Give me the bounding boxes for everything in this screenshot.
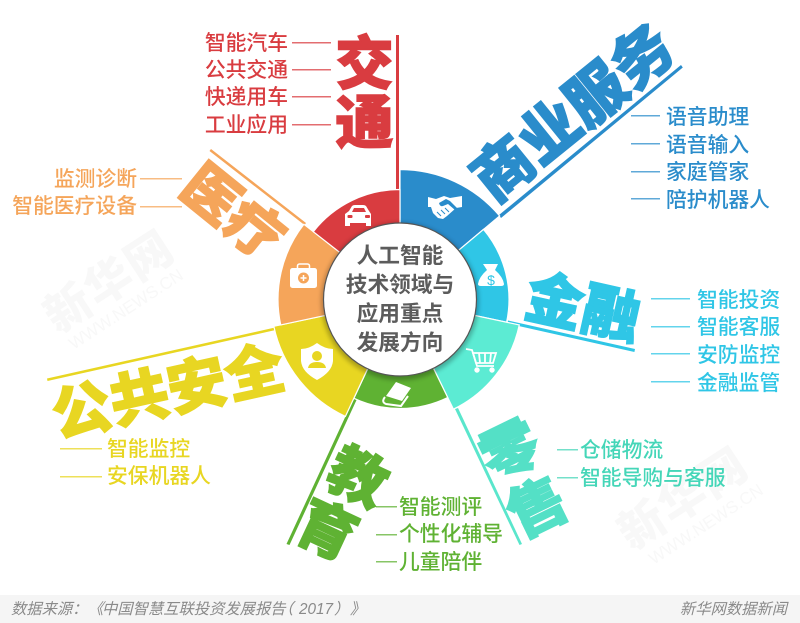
icon: medical kit xyxy=(290,264,317,288)
items: healthcare xyxy=(12,168,182,218)
title: public safety: 公共安全 xyxy=(46,335,291,450)
items: finance: 金融监管 xyxy=(697,372,780,395)
items: transport: 工业应用 xyxy=(205,114,288,137)
divider line: public safety xyxy=(47,328,276,381)
title: transport: 通 xyxy=(335,91,394,156)
icon: shopping cart xyxy=(466,349,496,372)
title: healthcare: 医疗 xyxy=(169,153,296,272)
source note: （ xyxy=(278,600,296,618)
items: public safety: 安保机器人 xyxy=(107,465,211,488)
items: education: 个性化辅导 xyxy=(399,523,503,546)
sector: business xyxy=(400,170,500,300)
title: finance: 金融 xyxy=(519,264,646,353)
items: business: 陪护机器人 xyxy=(666,189,770,212)
items: retail: 智能导购与客服 xyxy=(580,467,726,490)
center title: 发展方向 xyxy=(357,330,443,355)
items: finance: 智能投资 xyxy=(697,289,780,312)
divider line: business xyxy=(499,65,683,218)
sector: healthcare xyxy=(278,224,400,325)
items: education: 智能测评 xyxy=(399,496,482,519)
items: retail xyxy=(557,439,726,490)
items: finance: 安防监控 xyxy=(697,344,780,367)
title: transport: 交 xyxy=(335,32,394,97)
center shadow xyxy=(321,222,479,380)
panel: retail xyxy=(455,408,726,550)
source note: 中国智慧互联投资发展报告 xyxy=(102,601,287,618)
items: business: 语音输入 xyxy=(666,134,749,157)
title: retail xyxy=(470,409,578,550)
center title xyxy=(346,243,454,355)
items: healthcare: 监测诊断 xyxy=(54,168,137,191)
center title: 人工智能 xyxy=(357,243,444,268)
items: finance xyxy=(651,289,780,395)
icon: car xyxy=(345,205,371,226)
sector: transport xyxy=(313,189,400,300)
panel: public safety xyxy=(46,328,291,488)
source note: 数据来源： xyxy=(11,601,88,618)
panel: business services xyxy=(460,12,770,218)
items: finance: 智能客服 xyxy=(697,316,780,339)
items: education xyxy=(376,496,503,574)
items: public safety xyxy=(60,438,211,488)
items: transport: 快递用车 xyxy=(205,86,288,109)
panel: transport xyxy=(205,32,399,190)
watermark: left: 新华网 xyxy=(35,221,184,343)
items: retail: 仓储物流 xyxy=(580,439,663,462)
title: education: 育 xyxy=(286,490,366,573)
items: business: 语音助理 xyxy=(666,106,749,129)
watermark: left: WWW.NEWS.CN xyxy=(65,265,187,353)
divider line: healthcare xyxy=(210,149,306,225)
items: transport: 智能汽车 xyxy=(205,32,288,55)
title: retail: 售 xyxy=(497,466,578,550)
icon: handshake xyxy=(428,196,462,219)
source note: 》 xyxy=(350,601,365,618)
title: education: 教 xyxy=(317,437,397,520)
title: education xyxy=(286,437,397,573)
source note: ） xyxy=(334,600,349,618)
divider line: retail xyxy=(455,408,522,545)
panel: education xyxy=(286,398,503,574)
icon: shield xyxy=(301,343,333,380)
footer bar xyxy=(0,595,800,623)
title: retail: 零 xyxy=(470,409,551,493)
items: public safety: 智能监控 xyxy=(107,438,190,461)
icon: money bag xyxy=(478,264,504,288)
source note: 2017 xyxy=(298,601,334,618)
sector: education xyxy=(354,300,448,409)
items: healthcare: 智能医疗设备 xyxy=(12,195,137,218)
icon: money bag: $ xyxy=(487,272,495,288)
items: transport xyxy=(205,32,331,137)
credit: 新华网数据新闻 xyxy=(680,601,789,618)
items: education: 儿童陪伴 xyxy=(399,550,482,574)
items: business: 家庭管家 xyxy=(666,161,749,184)
sector: public safety xyxy=(274,300,400,416)
watermark: right: WWW.NEWS.CN xyxy=(645,480,767,568)
chart: radial sector ring xyxy=(274,170,519,416)
panel: healthcare xyxy=(12,149,306,272)
divider line: transport xyxy=(396,35,399,190)
sector: retail xyxy=(400,300,519,409)
panel: finance xyxy=(508,264,780,395)
sector: finance xyxy=(400,229,509,322)
icon: book xyxy=(383,382,411,406)
items: business xyxy=(631,106,770,212)
divider line: finance xyxy=(508,320,635,352)
center title: 应用重点 xyxy=(357,301,443,326)
title: transport xyxy=(335,32,394,156)
divider line: education xyxy=(286,398,357,545)
items: transport: 公共交通 xyxy=(205,59,288,82)
title: business services: 商业服务 xyxy=(460,12,687,214)
watermark: right: 新华网 xyxy=(609,438,758,560)
center title: 技术领域与 xyxy=(346,272,454,297)
source note: 《 xyxy=(88,601,106,618)
center circle xyxy=(324,223,476,376)
